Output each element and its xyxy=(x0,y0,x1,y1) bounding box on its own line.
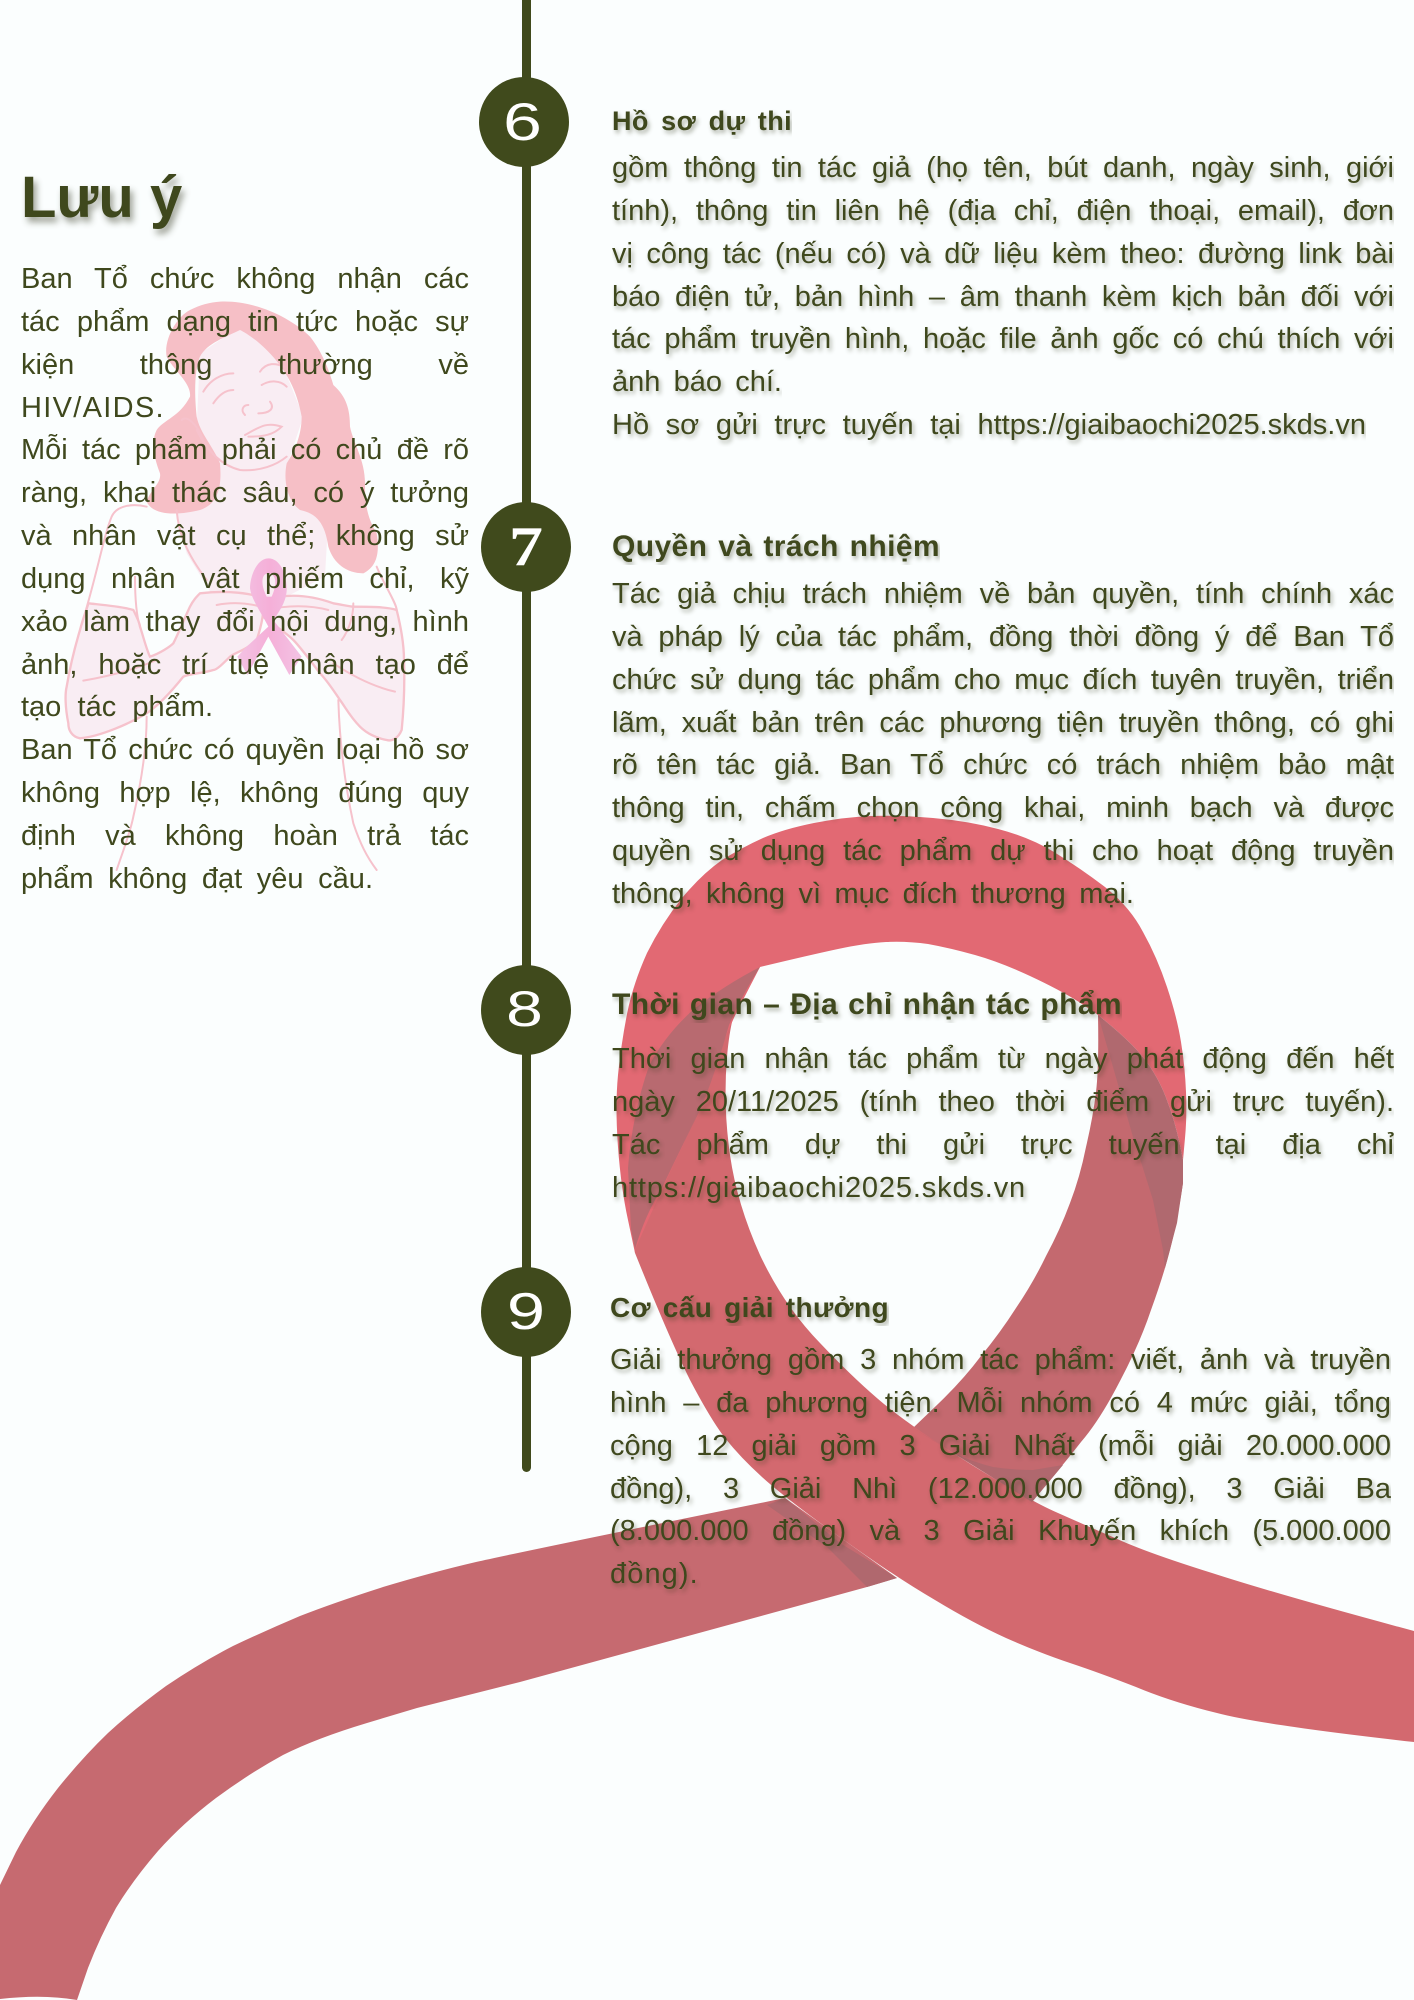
text block: notes: Ban Tổ chức không nhận các xyxy=(21,263,469,295)
text block: step 9: cộng 12 giải gồm 3 Giải Nhất (mỗi giải 20.000.000 xyxy=(610,1430,1391,1462)
text block: step 6 xyxy=(612,152,1394,446)
text block: step 9: đồng). xyxy=(610,1558,699,1590)
text block: notes: Mỗi tác phẩm phải có chủ đề rõ xyxy=(21,434,469,466)
text block: step 6: gồm thông tin tác giả (họ tên, bút danh, ngày sinh, giới xyxy=(612,152,1394,184)
text block: step 9 xyxy=(610,1344,1391,1594)
ribbon: strand behind the crossing xyxy=(913,1015,1183,1502)
text block: notes: Ban Tổ chức có quyền loại hồ sơ xyxy=(21,734,469,766)
step 6 marker xyxy=(479,77,569,167)
text block: notes: không hợp lệ, không đúng quy xyxy=(21,777,469,809)
text block: step 7: quyền sử dụng tác phẩm dự thi cho hoạt động truyền xyxy=(612,835,1394,867)
heading: step 7: Quyền và trách nhiệm xyxy=(612,530,940,563)
text block: step 7: chức sử dụng tác phẩm cho mục đích tuyên truyền, triển xyxy=(612,664,1394,696)
illustration: woman holding a pink ribbon xyxy=(66,302,404,870)
red ribbon xyxy=(0,816,1414,2000)
text block: step 7: thông, không vì mục đích thương mại. xyxy=(612,878,1134,910)
step 8 marker: 8 xyxy=(506,982,543,1037)
heading: step 8: Thời gian – Địa chỉ nhận tác phẩm xyxy=(612,988,1122,1021)
text block: step 7: và pháp lý của tác phẩm, đồng thời đồng ý để Ban Tổ xyxy=(612,621,1394,653)
text block: notes: xảo làm thay đổi nội dung, hình xyxy=(21,606,469,638)
text block: step 8: https://giaibaochi2025.skds.vn xyxy=(612,1172,1026,1204)
step 7 marker xyxy=(481,502,571,592)
text block: step 6: tính), thông tin liên hệ (địa chỉ, điện thoại, email), đơn xyxy=(612,195,1394,227)
step 7 marker: 7 xyxy=(509,515,543,578)
text block: notes: HIV/AIDS. xyxy=(21,392,165,424)
step 8 marker xyxy=(481,965,571,1055)
timeline line xyxy=(522,0,531,1472)
text block: notes: kiện thông thường về xyxy=(21,349,469,381)
text block: notes: dụng nhân vật phiếm chỉ, kỹ xyxy=(21,563,469,595)
text block: step 8 xyxy=(612,1043,1394,1208)
ribbon: left tail xyxy=(0,1498,897,2000)
ribbon: crossing shadow of the left tail xyxy=(767,1498,897,1587)
timeline xyxy=(479,0,571,1472)
text block: step 9: hình – đa phương tiện. Mỗi nhóm có 4 mức giải, tổng xyxy=(610,1387,1391,1419)
text block: notes: và nhân vật cụ thể; không sử xyxy=(21,520,469,552)
text block: step 7: thông tin, chấm chọn công khai, minh bạch và được xyxy=(612,792,1394,824)
text block: step 8: ngày 20/11/2025 (tính theo thời điểm gửi trực tuyến). xyxy=(612,1086,1394,1118)
text block: notes: ảnh, hoặc trí tuệ nhân tạo để xyxy=(21,649,469,681)
text block: step 6: ảnh báo chí. xyxy=(612,366,782,398)
step 9 marker xyxy=(481,1267,571,1357)
ribbon: right fold shadow xyxy=(1098,1015,1183,1268)
text block: step 8: Thời gian nhận tác phẩm từ ngày phát động đến hết xyxy=(612,1043,1394,1075)
woman's face and body lines xyxy=(80,364,397,870)
text block: step 7: Tác giả chịu trách nhiệm về bản quyền, tính chính xác xyxy=(612,578,1394,610)
ribbon: left fold shadow xyxy=(628,967,760,1249)
text block: step 7: rõ tên tác giả. Ban Tổ chức có trách nhiệm bảo mật xyxy=(612,749,1394,781)
text block: step 9: Giải thưởng gồm 3 nhóm tác phẩm: viết, ảnh và truyền xyxy=(610,1344,1391,1376)
pink ribbon held by the woman xyxy=(237,558,302,675)
text block: notes: ràng, khai thác sâu, có ý tưởng xyxy=(21,477,469,509)
woman's hair xyxy=(147,302,378,573)
step 6 marker: 6 xyxy=(503,93,542,152)
text block: step 6: báo điện tử, bản hình – âm thanh kèm kịch bản đối với xyxy=(612,281,1394,313)
woman's skin and clothing xyxy=(175,327,328,597)
text block: notes: phẩm không đạt yêu cầu. xyxy=(21,863,373,895)
text block: step 7: lãm, xuất bản trên các phương tiện truyền thông, có ghi xyxy=(612,707,1394,739)
text block: step 9: (8.000.000 đồng) và 3 Giải Khuyến khích (5.000.000 xyxy=(610,1515,1391,1547)
ribbon: crossing shadow of the right strand xyxy=(913,1428,1063,1502)
heading: step 9: Cơ cấu giải thưởng xyxy=(610,1292,889,1323)
text block: step 6: vị công tác (nếu có) và dữ liệu kèm theo: đường link bài xyxy=(612,238,1394,270)
step 9 marker: 9 xyxy=(507,1282,545,1340)
text block: step 8: Tác phẩm dự thi gửi trực tuyến tại địa chỉ xyxy=(612,1129,1394,1161)
text block: notes: định và không hoàn trả tác xyxy=(21,820,469,852)
text block: notes: tạo tác phẩm. xyxy=(21,691,213,723)
text block: step 9: đồng), 3 Giải Nhì (12.000.000 đồng), 3 Giải Ba xyxy=(610,1473,1391,1505)
text block: step 7 xyxy=(612,578,1394,914)
ribbon: front band to the right edge xyxy=(628,967,1414,1742)
heading: step 6: Hồ sơ dự thi xyxy=(612,106,792,136)
text block: step 6: Hồ sơ gửi trực tuyến tại https://giaibaochi2025.skds.vn xyxy=(612,409,1366,441)
title: Lưu ý: Lưu ý xyxy=(21,165,182,230)
text block: notes: tác phẩm dạng tin tức hoặc sự xyxy=(21,306,469,338)
text block: step 6: tác phẩm truyền hình, hoặc file ảnh gốc có chú thích với xyxy=(612,323,1394,355)
text block: notes xyxy=(21,263,469,895)
ribbon: top arch xyxy=(616,816,1186,1253)
